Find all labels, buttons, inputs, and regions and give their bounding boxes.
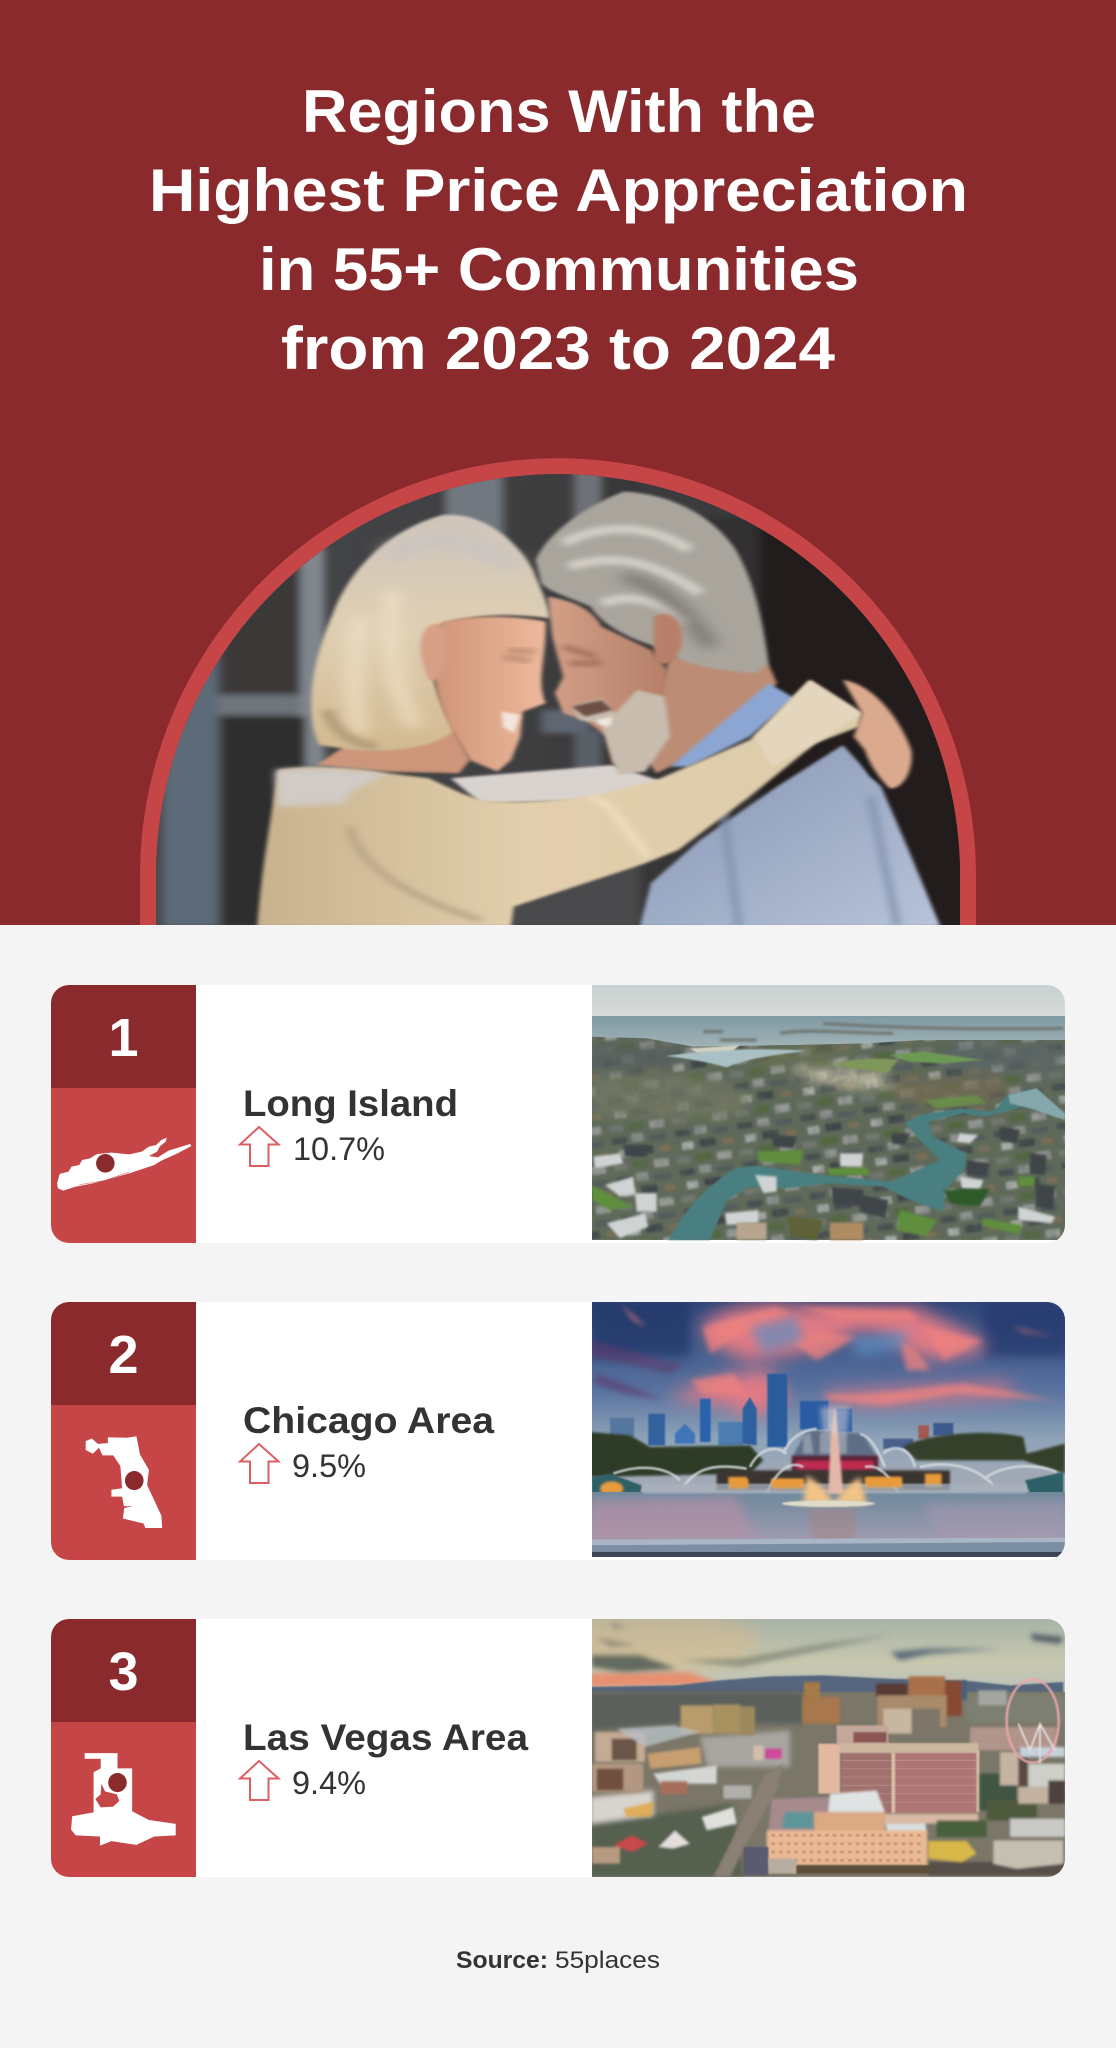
ferris wheel: [1007, 1679, 1059, 1764]
waterfront houses: [593, 1133, 1055, 1238]
photo: Long Island waterfront aerial: [590, 980, 1070, 1242]
man neck: [640, 657, 777, 773]
rank badge 1: [51, 985, 196, 1243]
lawns: [592, 1150, 1035, 1240]
icon: Chicago map: [86, 1436, 162, 1528]
photo: senior couple embracing: [156, 474, 960, 925]
arch ring: [140, 458, 976, 925]
stone wall: [592, 1542, 1065, 1556]
woman ear: [421, 623, 447, 681]
man ear: [654, 614, 682, 664]
source line: 55places: [555, 1947, 660, 1974]
woman hand: [843, 680, 912, 788]
value 9.5%: 9.5%: [292, 1448, 366, 1484]
value 9.4%: 9.4%: [292, 1765, 366, 1801]
woman far sleeve: [451, 765, 667, 803]
water jets: [613, 1429, 1057, 1494]
trees: [590, 1432, 763, 1477]
front hotel windows: [772, 1835, 923, 1860]
title: Regions With the: [302, 78, 816, 145]
mountains: [592, 1674, 1064, 1692]
card 3: Las Vegas Area: [51, 1610, 1070, 1877]
woman face: [433, 617, 546, 772]
icon: Las Vegas map: [71, 1753, 176, 1846]
source line: Source:: [456, 1947, 548, 1974]
photo: Chicago skyline and Buckingham Fountain: [590, 1300, 1070, 1557]
source line: [456, 1947, 660, 1974]
text: Chicago Area: Chicago Area: [243, 1400, 494, 1441]
strip road: [713, 1764, 783, 1877]
photo: Las Vegas Strip aerial: [592, 1619, 1065, 1877]
title: Highest Price Appreciation: [149, 157, 968, 224]
man beard: [571, 690, 670, 775]
arrow up: [240, 1444, 278, 1483]
rank badge 1: 1: [108, 1008, 139, 1068]
icon: Long Island map: [57, 1138, 191, 1191]
arrow up: [240, 1127, 278, 1166]
man hair: [536, 492, 769, 673]
title: in 55+ Communities: [259, 236, 859, 303]
rocks and seahorses: [592, 1473, 642, 1492]
central jet: [828, 1407, 843, 1494]
title: [149, 78, 968, 382]
fountain tiers: [717, 1430, 950, 1490]
value 10.7%: 10.7%: [293, 1131, 385, 1167]
title: from 2023 to 2024: [281, 315, 836, 382]
front hotel and surroundings: [767, 1747, 1065, 1875]
towers background: [681, 1676, 1057, 1750]
card 2: Chicago Area: [51, 1300, 1070, 1560]
text: Las Vegas Area: Las Vegas Area: [243, 1717, 528, 1758]
man face: [548, 597, 667, 770]
basin: [590, 1492, 1070, 1542]
big hotel: [818, 1725, 979, 1813]
rank badge 2: [51, 1302, 196, 1560]
card 1: Long Island: [51, 980, 1070, 1243]
rank badge 3: 3: [108, 1642, 139, 1702]
hotel window lines: [842, 1760, 977, 1802]
channels: [668, 1088, 1065, 1240]
skyline: [610, 1374, 953, 1449]
woman smile: [502, 712, 520, 733]
man collar: [670, 683, 795, 767]
woman hair: [311, 515, 549, 751]
rank badge 3: [51, 1619, 196, 1877]
text: Long Island: Long Island: [243, 1083, 458, 1124]
sweater body and arm: [257, 680, 862, 927]
fountain lights: [728, 1474, 942, 1489]
backdrop: [156, 474, 960, 925]
city base: [590, 1692, 1065, 1877]
arrow up: [240, 1761, 278, 1800]
left buildings: [592, 1725, 782, 1864]
dark gap behind wrist: [856, 756, 882, 786]
woman neck: [316, 730, 470, 773]
header panel: [0, 0, 1116, 925]
rank badge 2: 2: [108, 1325, 139, 1385]
man shirt: [640, 745, 940, 927]
